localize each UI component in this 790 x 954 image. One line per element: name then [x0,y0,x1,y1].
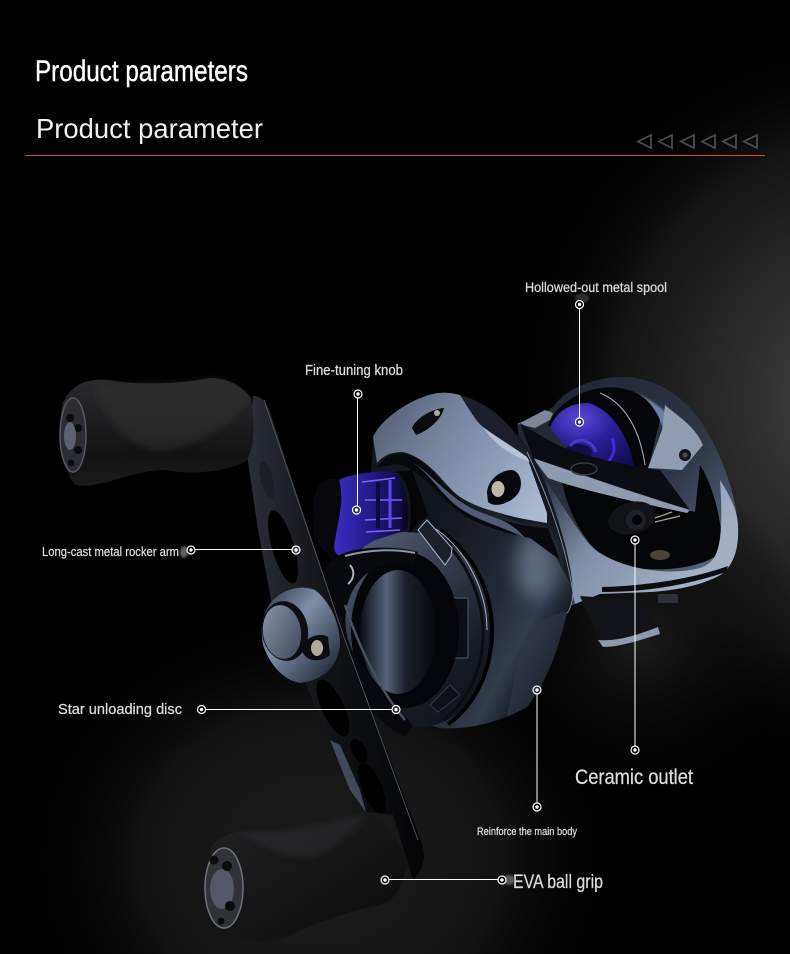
bottom grip end cap [205,848,243,928]
title: Product parameters [35,55,248,88]
callout: ceramic outlet: Ceramic outlet [575,766,693,789]
right seam line [527,452,573,613]
steel corner panel [648,405,703,470]
lower cowl [507,612,567,716]
lit lower body [431,506,573,728]
handle arm [247,396,424,880]
vent slots [602,566,728,592]
callout: star unloading disc: Star unloading disc [58,701,182,718]
knob collar [395,470,428,533]
steel top panel [373,393,547,523]
hub screw [301,635,330,660]
top grip end cap [60,398,86,472]
reel main sideplate [345,392,573,728]
star drag wheel [305,548,418,737]
center opening [351,552,459,708]
spool window frame [548,387,660,470]
top cowl vent [412,408,444,435]
callout: reinforce the main body [477,686,577,838]
lower slot [430,685,460,712]
header rule [25,155,765,156]
callout: EVA ball grip [381,872,603,893]
callout: ceramic outlet [575,536,693,789]
upper dark stripe [460,395,534,458]
fishing reel illustration [60,377,738,941]
icon: left-pointing arrow row [638,135,757,148]
outer ring line [440,530,492,724]
dark groove [376,454,560,560]
callout: long-cast metal rocker arm [42,544,300,559]
callout: hollowed-out metal spool [525,279,667,426]
spool rim highlights [600,393,645,465]
blue spool [550,403,634,466]
callout: star unloading disc [58,701,400,718]
inner cavity [560,465,722,569]
dark wedge bridge [520,423,690,510]
side slot [451,598,468,658]
line guide barrel [605,496,680,560]
bottom handle grip [205,813,407,941]
callout: hollowed-out metal spool: Hollowed-out metal spool [525,279,667,295]
steel shoulder band [545,480,738,604]
knob base disk [312,479,345,560]
tuning knob [312,470,428,560]
subtitle: Product parameter [36,113,263,144]
callout: fine-tuning knob [305,363,403,514]
callout: fine-tuning knob: Fine-tuning knob [305,363,403,379]
wire clip [518,410,553,428]
callout: EVA ball grip: EVA ball grip [513,872,603,893]
top arch highlight [632,395,675,432]
trigger paddle [580,596,660,647]
sideplate front plate [325,532,492,727]
side clip [418,520,452,565]
body screw [487,470,521,505]
callout: long-cast metal rocker arm: Long-cast metal rocker arm [42,544,179,559]
handle hub [258,588,340,683]
top handle grip [60,378,253,486]
reel rear housing [517,377,738,647]
callout: reinforce the main body: Reinforce the main body [477,826,577,838]
